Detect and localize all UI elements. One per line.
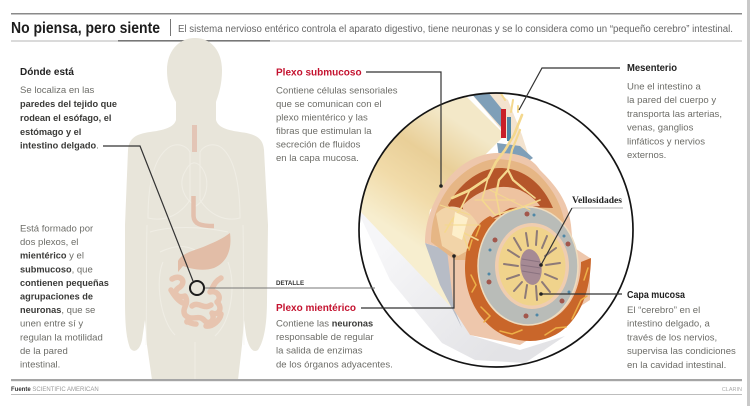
icon: vessels in mucosa — [486, 212, 570, 318]
text block: Dónde está: estómago y el — [20, 127, 81, 137]
text block: plexos: regulan la motilidad — [20, 332, 103, 343]
text block: Capa mucosa — [627, 290, 736, 371]
title: No piensa, pero siente — [11, 20, 160, 37]
text block: Mesenterio: externos. — [627, 150, 666, 161]
text block: Mesenterio: transporta las arterias, — [627, 109, 722, 120]
text block: plexos: intestinal. — [20, 360, 60, 370]
subtitle: El sistema nervioso entérico controla el aparato digestivo, tiene neuronas y se lo considera como un “pequeño cerebro” intestinal. — [178, 24, 733, 35]
text block: Plexo mientérico: la salida de enzimas — [276, 346, 363, 356]
leader line: Capa mucosa — [539, 292, 622, 296]
label: Velosidades: Vellosidades — [572, 195, 623, 205]
text block: Plexo submucoso: en la capa mucosa. — [276, 153, 359, 164]
leader line: Velosidades — [539, 208, 623, 267]
icon: nerves — [440, 92, 540, 248]
text block: Dónde está — [20, 67, 117, 152]
text block: Capa mucosa: supervisa las condiciones — [627, 346, 736, 357]
text block: Mesenterio — [627, 63, 722, 161]
text block: Plexo submucoso: fibras que estimulan la — [276, 126, 372, 137]
source: Fuente SCIENTIFIC AMERICAN — [11, 387, 99, 393]
text block: plexos: unen entre sí y — [20, 319, 83, 330]
text block: Mesenterio: la pared del cuerpo y — [627, 95, 716, 106]
text block: Capa mucosa: en la cavidad intestinal. — [627, 360, 726, 371]
text block: plexos: neuronas, que se — [20, 305, 95, 316]
text block: Mesenterio: linfáticos y nervios — [627, 136, 705, 148]
text block: Capa mucosa: Capa mucosa — [627, 290, 685, 301]
text block: Capa mucosa: través de los nervios, — [627, 332, 717, 344]
shadow — [355, 205, 565, 363]
text block: Plexo submucoso: plexo mientérico y las — [276, 112, 368, 124]
text block: plexos: mientérico y el — [20, 251, 84, 262]
icon: grey outer layer — [425, 243, 462, 328]
icon: mesentery — [473, 94, 533, 160]
icon: mucosa ring — [478, 207, 578, 325]
text block: Dónde está: paredes del tejido que — [20, 99, 117, 109]
text block: Mesenterio: venas, ganglios — [627, 122, 694, 134]
text block: Plexo submucoso: que se comunican con el — [276, 99, 382, 110]
detail illustration: intestine cross-section — [340, 85, 633, 367]
leader line: Plexo mientérico — [361, 254, 456, 308]
icon: detail marker circle — [190, 281, 204, 295]
icon: outer envelope — [425, 153, 590, 345]
icon: veins in muscle ring — [469, 226, 588, 335]
leader line: Dónde está — [103, 146, 193, 281]
text block: Plexo mientérico: de los órganos adyacentes. — [276, 360, 393, 370]
icon: inner pale layer — [462, 186, 540, 224]
icon: villi — [498, 226, 566, 306]
text block: plexos: submucoso, que — [20, 264, 93, 275]
leader line: body to detail — [204, 287, 375, 289]
icon: small intestine — [171, 277, 221, 326]
text block: Plexo submucoso — [276, 68, 398, 164]
icon: esophagus — [192, 125, 197, 152]
text block: Mesenterio: Mesenterio — [627, 63, 677, 74]
leader line: Plexo submucoso — [366, 72, 443, 188]
icon: muscle ring — [465, 216, 591, 341]
text block: Plexo mientérico: responsable de regular — [276, 332, 374, 343]
text block: Dónde está: intestino delgado. — [20, 140, 99, 152]
icon: arm and torso outlines — [146, 145, 244, 380]
text block: Dónde está: Dónde está — [20, 67, 74, 78]
leader line: Mesenterio — [519, 68, 620, 110]
text block: plexos: agrupaciones de — [20, 292, 93, 302]
credit: CLARIN — [722, 387, 742, 393]
text block: plexos: Está formado por — [20, 224, 94, 234]
text block: Capa mucosa: El “cerebro” en el — [627, 305, 700, 316]
text block: plexos — [20, 224, 109, 370]
text block: plexos: de la pared — [20, 346, 68, 357]
text block: plexos: contienen pequeñas — [20, 278, 109, 288]
text block: Mesenterio: Une el intestino a — [627, 82, 701, 92]
text block: Plexo submucoso: secreción de fluidos — [276, 140, 361, 150]
text block: Plexo mientérico: Plexo mientérico — [276, 303, 356, 314]
icon: speckled layer — [431, 159, 565, 260]
text block: Plexo mientérico — [276, 303, 393, 370]
text block: plexos: dos plexos, el — [20, 237, 78, 248]
text block: Plexo submucoso: Contiene células sensoriales — [276, 86, 398, 96]
label: DETALLE: DETALLE — [276, 280, 304, 287]
icon: submucosal plexus region — [436, 206, 480, 256]
text block: Plexo mientérico: Contiene las neuronas — [276, 318, 373, 330]
human body illustration — [125, 38, 268, 380]
icon: intestine tube — [361, 97, 502, 307]
icon: stomach — [178, 233, 230, 272]
text block: Capa mucosa: intestino delgado, a — [627, 318, 710, 330]
text block: Plexo submucoso: Plexo submucoso — [276, 68, 362, 78]
icon: dark muscle band — [448, 168, 553, 218]
text block: Dónde está: rodean el esófago, el — [20, 113, 111, 123]
text block: Dónde está: Se localiza en las — [20, 85, 95, 96]
